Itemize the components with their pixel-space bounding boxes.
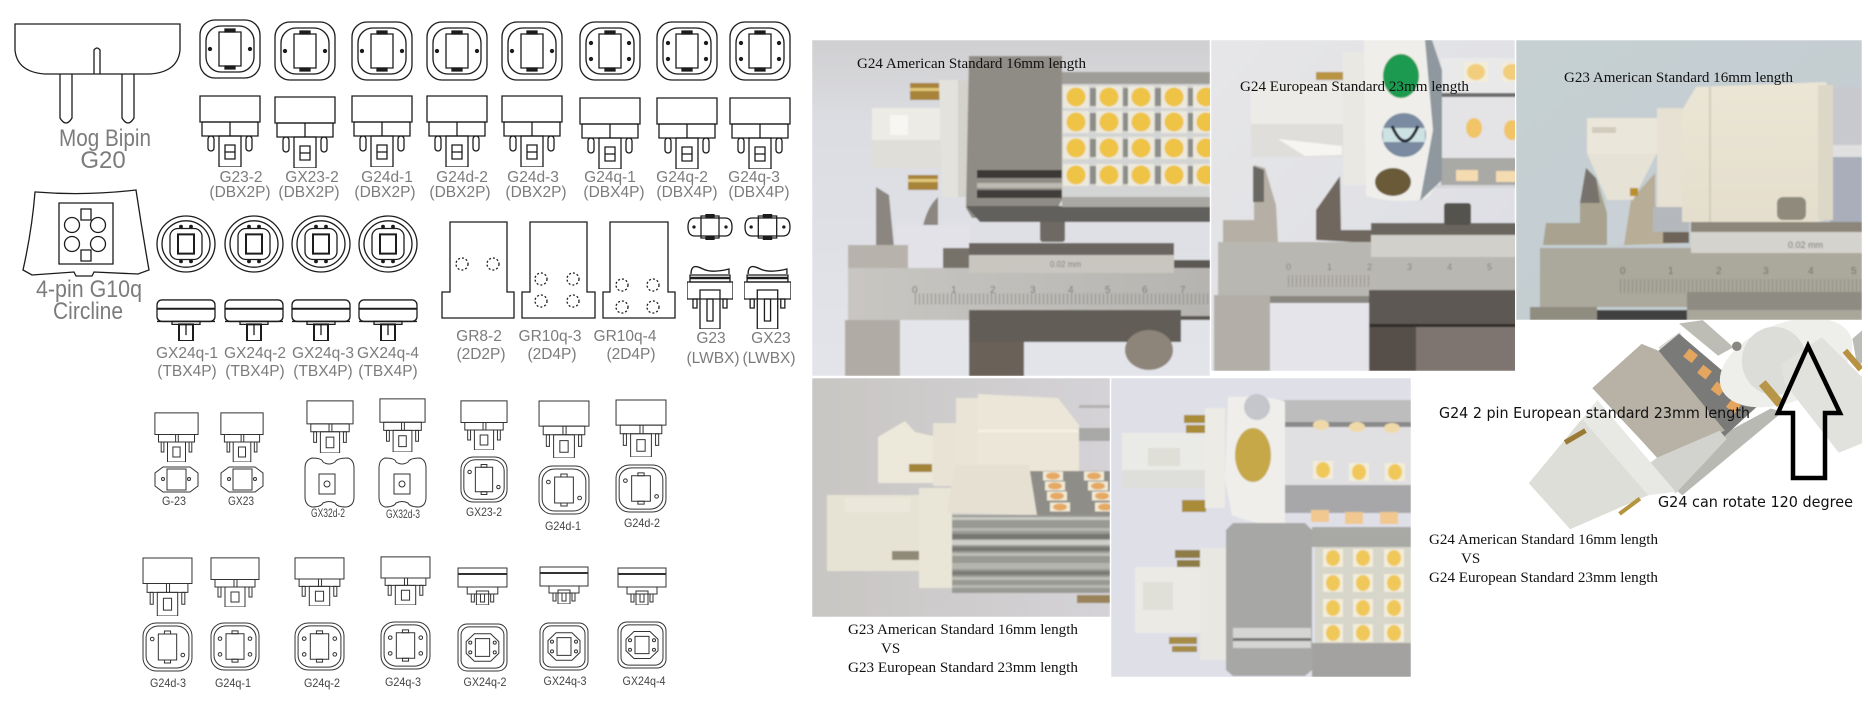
lamp G24q-2 xyxy=(656,22,718,201)
lamp G24q-3: G24q-3 xyxy=(728,169,780,186)
photo: G24 European standard on caliper: 0 xyxy=(1286,262,1291,272)
lamp GX24q-2: (TBX4P) xyxy=(225,363,285,380)
line art: GR10q-3 base xyxy=(519,222,595,363)
line art row: DBX lamp bases xyxy=(200,20,790,201)
lamp G24q-3 xyxy=(381,557,430,689)
lamp G24d-3: (DBX2P) xyxy=(505,184,567,201)
photo: G24 American standard on caliper: 0.02 mm xyxy=(1050,260,1081,269)
lamp GX24q-1 xyxy=(156,216,218,380)
caption: G24 American vs European: G24 American Standard 16mm length xyxy=(1429,532,1658,548)
lamp G24d-3 xyxy=(143,558,192,690)
photo: G24 European standard on caliper: 2 xyxy=(1367,262,1372,272)
lamp G24d-2 xyxy=(427,22,491,201)
lower chart row 2 xyxy=(143,557,666,690)
caption: G24 American vs European: G24 European Standard 23mm length xyxy=(1429,570,1658,586)
lamp G24q-3: G24q-3 xyxy=(385,675,421,689)
caption: G23 American vs European: G23 European Standard 23mm length xyxy=(848,660,1078,676)
line art row: TBX4P round bases xyxy=(156,216,419,380)
lamp GX23-2: GX23-2 xyxy=(285,169,339,186)
lamp GX23-2 xyxy=(275,22,340,201)
caption: G24 2 pin European: G24 2 pin European standard 23mm length xyxy=(1439,404,1750,422)
lamp G24q-1: G24q-1 xyxy=(215,676,251,690)
lower chart row 1 xyxy=(155,399,666,533)
photo: G24 American standard on caliper: 2 xyxy=(990,285,996,296)
lamp GX24q-3: GX24q-3 xyxy=(544,674,587,688)
lamp GX24q-2: GX24q-2 xyxy=(224,345,286,362)
line art: GX23 LWBX: (LWBX) xyxy=(742,350,796,367)
photo: G23 American standard on caliper: 2 xyxy=(1716,266,1722,277)
photo: G23 American standard on caliper: 3 xyxy=(1763,266,1769,277)
photo: G24 European standard on caliper: 3 xyxy=(1407,262,1412,272)
lamp GX24q-2 xyxy=(458,568,507,689)
photo: G23 American vs European xyxy=(812,378,1115,617)
lamp GX24q-4: GX24q-4 xyxy=(357,345,419,362)
photo: G23 American standard on caliper: 5 xyxy=(1851,266,1857,277)
line art: Mog Bipin G20 base: G20 xyxy=(80,147,126,174)
line art: Mog Bipin G20 base xyxy=(15,24,180,174)
lamp GX32d-3 xyxy=(379,399,426,521)
caption: G23 American: G23 American Standard 16mm length xyxy=(1564,70,1793,86)
lamp GX23-2: GX23-2 xyxy=(466,505,502,519)
lamp GX23: GX23 xyxy=(228,494,254,508)
lamp G24q-2: (DBX4P) xyxy=(656,184,718,201)
line art: GR8-2 base: GR8-2 xyxy=(456,328,502,345)
line art: 4-pin G10q Circline base xyxy=(23,190,149,325)
photo: G24 American standard on caliper: 6 xyxy=(1142,285,1148,296)
lamp GX24q-2 xyxy=(224,216,286,380)
lamp G24q-1 xyxy=(580,22,645,201)
photo: G23 American standard on caliper: 4 xyxy=(1808,266,1814,277)
lamp G24d-1 xyxy=(352,22,416,201)
line art: GR8-2 base xyxy=(442,222,514,363)
lamp G24q-1: (DBX4P) xyxy=(583,184,645,201)
lamp GX24q-4: GX24q-4 xyxy=(622,674,666,688)
lamp GX24q-3: GX24q-3 xyxy=(292,345,354,362)
lamp GX24q-1: (TBX4P) xyxy=(157,363,217,380)
lamp GX23-2: (DBX2P) xyxy=(278,184,340,201)
lamp G24d-3 xyxy=(502,22,567,201)
lamp G24q-2: G24q-2 xyxy=(656,169,708,186)
line art: GX23 LWBX: GX23 xyxy=(751,330,791,347)
lamp G-23 xyxy=(155,413,198,508)
caption: G23 American vs European: G23 American Standard 16mm length xyxy=(848,622,1078,638)
lamp G24q-3: (DBX4P) xyxy=(728,184,790,201)
caption: G24 American vs European: VS xyxy=(1461,551,1480,567)
lamp GX23-2 xyxy=(461,401,507,519)
photo: G24 European standard on caliper xyxy=(1211,40,1526,371)
lamp GX24q-3 xyxy=(292,216,354,380)
lamp G23-2: G23-2 xyxy=(219,169,263,186)
lamp GX24q-3: (TBX4P) xyxy=(293,363,353,380)
photo: G24 American standard on caliper xyxy=(812,40,1231,376)
photo: G24 American standard on caliper: 0 xyxy=(912,285,918,296)
lamp G24d-1: (DBX2P) xyxy=(354,184,416,201)
photo: G24 American standard on caliper: 7 xyxy=(1180,285,1186,296)
lamp GX24q-4 xyxy=(618,568,666,688)
line art: GR10q-4 base: GR10q-4 xyxy=(594,328,657,345)
arrow: rotation indicator xyxy=(1778,346,1840,478)
line art: G23 LWBX: (LWBX) xyxy=(686,350,740,367)
photo: G24 European standard on caliper: 4 xyxy=(1447,262,1452,272)
photo: G24 American standard on caliper: 3 xyxy=(1030,285,1036,296)
lamp G24q-3 xyxy=(728,22,790,201)
photo: G23 American standard on caliper: 0.02 mm xyxy=(1788,240,1823,250)
photo: G24 American standard on caliper: 1 xyxy=(951,285,957,296)
photo: G24 American vs European top view xyxy=(1111,378,1411,677)
line art: GR10q-4 base: (2D4P) xyxy=(606,346,656,363)
lamp G23-2: (DBX2P) xyxy=(209,184,271,201)
lamp G24d-2: (DBX2P) xyxy=(429,184,491,201)
line art: GR10q-3 base: (2D4P) xyxy=(527,346,577,363)
line art: GX23 LWBX xyxy=(742,214,796,367)
caption: G24 European: G24 European Standard 23mm length xyxy=(1240,79,1469,95)
caption: G23 American vs European: VS xyxy=(881,641,900,657)
lamp G24d-2 xyxy=(616,400,666,530)
lamp GX24q-3 xyxy=(540,567,588,688)
photo: G23 American standard on caliper xyxy=(1516,40,1862,320)
photo: G24 American standard on caliper: 5 xyxy=(1105,285,1111,296)
photo: G24 European standard on caliper: 5 xyxy=(1487,262,1492,272)
caption: G24 American: G24 American Standard 16mm length xyxy=(857,56,1086,72)
lamp GX23 xyxy=(221,413,263,508)
lamp G24d-3: G24d-3 xyxy=(150,676,186,690)
photo: G23 American standard on caliper: 0 xyxy=(1620,266,1626,277)
lamp GX24q-2: GX24q-2 xyxy=(464,675,507,689)
lamp G24d-3: G24d-3 xyxy=(507,169,559,186)
lamp G24q-2 xyxy=(295,558,344,690)
lamp G-23: G-23 xyxy=(162,494,186,508)
lamp G24q-1: G24q-1 xyxy=(584,169,636,186)
lamp GX24q-4: (TBX4P) xyxy=(358,363,418,380)
lamp G24d-1 xyxy=(539,401,589,533)
lamp GX32d-3: GX32d-3 xyxy=(386,507,420,521)
photo: G24 European standard on caliper: 1 xyxy=(1327,262,1332,272)
lamp GX24q-1: GX24q-1 xyxy=(156,345,218,362)
line art: 4-pin G10q Circline base: 4-pin G10q xyxy=(36,276,142,303)
photo: G24 American standard on caliper: 4 xyxy=(1068,285,1074,296)
line art: G23 LWBX xyxy=(686,214,740,367)
lamp G23-2 xyxy=(200,20,271,201)
lamp G24q-1 xyxy=(211,558,259,690)
line art: G23 LWBX: G23 xyxy=(696,330,726,347)
photo: rotated G24 2-pin lamp xyxy=(1528,320,1862,530)
lamp GX32d-2 xyxy=(305,401,354,520)
line art: Mog Bipin G20 base: Mog Bipin xyxy=(59,125,151,152)
lamp G24d-1: G24d-1 xyxy=(361,169,413,186)
line art: GR8-2 base: (2D2P) xyxy=(456,346,506,363)
line art: GR10q-3 base: GR10q-3 xyxy=(519,328,581,345)
lamp G24d-1: G24d-1 xyxy=(545,519,581,533)
lamp GX32d-2: GX32d-2 xyxy=(311,506,345,520)
line art: GR10q-4 base xyxy=(594,222,675,363)
caption: G24 American vs European xyxy=(1429,532,1658,586)
photo: G23 American standard on caliper: 1 xyxy=(1668,266,1674,277)
lamp G24d-2: G24d-2 xyxy=(624,516,660,530)
line art: 4-pin G10q Circline base: Circline xyxy=(53,298,123,325)
caption: G24 can rotate: G24 can rotate 120 degree xyxy=(1658,493,1853,511)
lamp G24q-2: G24q-2 xyxy=(304,676,340,690)
lamp G24d-2: G24d-2 xyxy=(436,169,488,186)
lamp GX24q-4 xyxy=(357,216,419,380)
caption: G23 American vs European xyxy=(848,622,1078,676)
